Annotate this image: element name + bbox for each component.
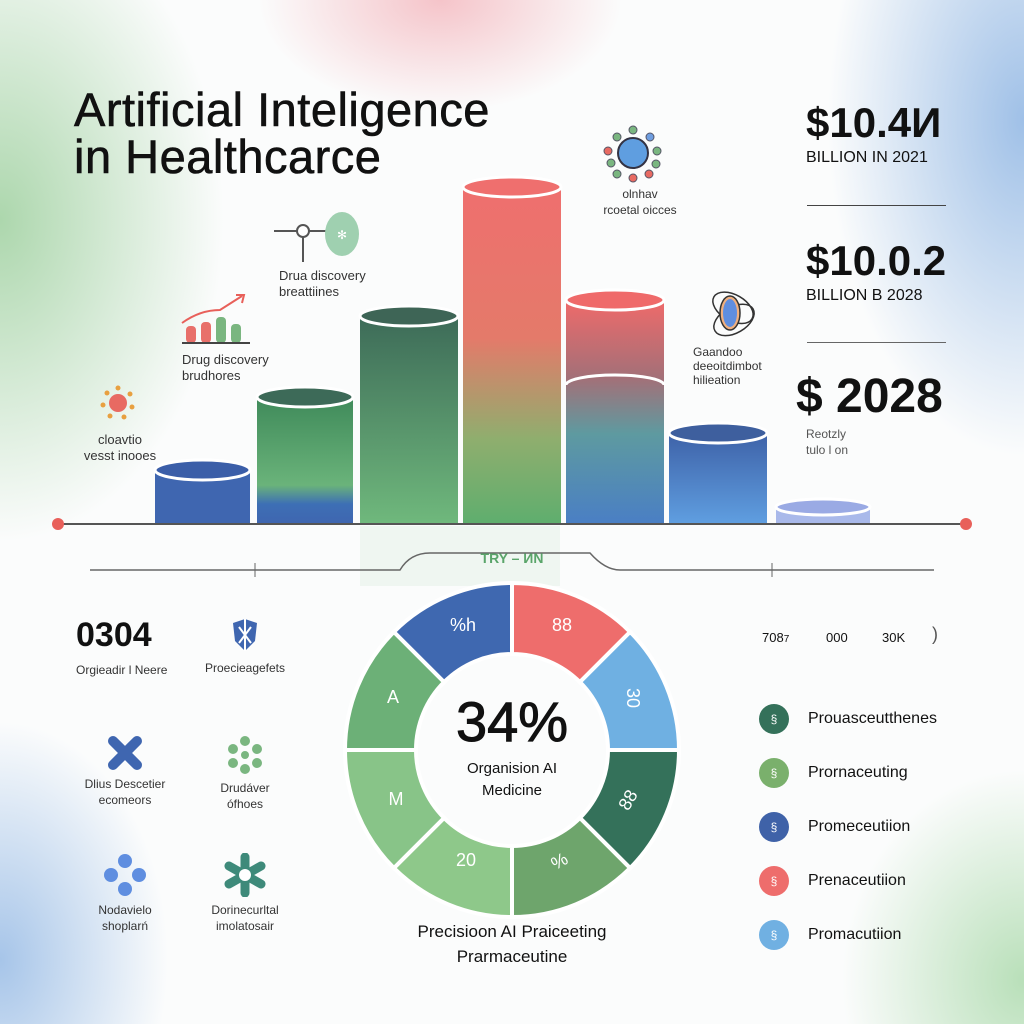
icon: green cluster: [228, 736, 262, 774]
segment light green 2: [345, 750, 444, 868]
text: imolatosair: [216, 919, 274, 933]
icon: atom: [707, 286, 760, 342]
icon: four dots: [104, 854, 146, 896]
stat: 2028: $10.0.2: [806, 237, 946, 284]
icons grid: Proecieagefets: [205, 661, 285, 675]
text: Nodavielo: [98, 903, 152, 917]
donut center text: Medicine: [482, 782, 542, 799]
segment light green 1: [394, 818, 512, 917]
text: shoplarń: [102, 919, 148, 933]
donut chart: A: [387, 687, 399, 707]
donut chart: 88: [552, 615, 572, 635]
text: Dlius Descetier: [85, 777, 165, 791]
icons grid: [205, 619, 285, 675]
donut chart: 30: [623, 688, 643, 708]
donut chart: %h: [450, 615, 476, 635]
donut chart: %: [548, 848, 571, 874]
icon: network node: [274, 212, 359, 262]
text: ófhoes: [227, 797, 263, 811]
text: rcoetal oicces: [603, 203, 677, 217]
legend: §: [771, 928, 777, 942]
stat: $2028: [796, 370, 943, 457]
donut caption: Precisioon AI Praiceeting: [418, 922, 606, 941]
bar labels: [84, 432, 156, 463]
segment red: [512, 583, 630, 682]
segment dark green: [580, 750, 679, 868]
legend: Prouasceutthenes: [808, 710, 937, 727]
legend: §: [771, 874, 777, 888]
bar 5: [566, 290, 664, 523]
legend: §: [771, 820, 777, 834]
title: Artificial Inteligence: [74, 83, 490, 136]
bar labels: cloavtio: [98, 432, 142, 447]
legend: Prornaceuting: [808, 764, 908, 781]
text: ): [932, 624, 938, 644]
title: [74, 83, 490, 183]
text: Gaandoo: [693, 345, 742, 359]
icon: blue x: [108, 736, 142, 770]
text: 000: [826, 630, 848, 645]
legend: §: [771, 766, 777, 780]
axis: [52, 518, 972, 530]
legend: Prenaceutiion: [808, 872, 906, 889]
icon: molecule ring: [604, 126, 661, 182]
stat: $2028: $ 2028: [796, 370, 943, 423]
bar chart: [52, 126, 972, 586]
bar 7: [776, 499, 870, 523]
donut chart: 88: [614, 786, 642, 814]
donut center text: [456, 690, 568, 799]
donut caption: Prarmaceutine: [457, 947, 567, 966]
text: hilieation: [693, 373, 740, 387]
donut center text: 34%: [456, 690, 568, 753]
donut caption: [418, 922, 606, 966]
text: breattiines: [279, 284, 339, 299]
segment light blue: [580, 632, 679, 750]
bar 1: [155, 460, 250, 523]
donut chart: M: [388, 789, 404, 809]
bar 4: [463, 177, 561, 523]
stat: $2028: tulo l on: [806, 443, 848, 457]
timeline line: TRY – ИN: [481, 550, 543, 566]
bar labels: vesst inooes: [84, 448, 156, 463]
segment blue: [394, 583, 512, 682]
left stat: 0304: [76, 616, 152, 654]
legend: [759, 704, 937, 950]
text: deeoitdimbot: [693, 359, 762, 373]
top right numbers: 7087: [762, 630, 789, 645]
text: Dorinecurltal: [211, 903, 279, 917]
icon: network node: ✻: [337, 228, 347, 242]
stat: 2021: BILLION IN 2021: [806, 149, 928, 166]
donut center text: Organision AI: [467, 760, 557, 777]
text: ecomeors: [99, 793, 151, 807]
icon: teal flower: [224, 853, 266, 897]
legend: Promeceutiion: [808, 818, 910, 835]
stat: 2021: $10.4И: [806, 99, 941, 146]
timeline line: [90, 550, 934, 577]
text: 30K: [882, 630, 905, 645]
text: brudhores: [182, 368, 241, 383]
legend: Promacutiion: [808, 926, 901, 943]
icon: virus: [100, 386, 134, 420]
icon: shield: [233, 619, 257, 650]
text: Orgieadir l Neere: [76, 663, 167, 677]
donut chart: 20: [456, 850, 476, 870]
segment green: [345, 632, 444, 750]
bar 2: [257, 387, 353, 523]
title: in Healthcarce: [74, 130, 381, 183]
text: Drudáver: [220, 781, 270, 795]
icon: mini bar chart: [182, 295, 250, 343]
stat: 2028: BILLION B 2028: [806, 287, 923, 304]
text: olnhav: [622, 187, 658, 201]
stat: $2028: Reotzly: [806, 427, 846, 441]
text: Drug discovery: [182, 352, 269, 367]
segment mid green: [512, 818, 630, 917]
legend: §: [771, 712, 777, 726]
bar 6: [669, 423, 767, 523]
bar 3: [360, 306, 458, 523]
text: Drua discovery: [279, 268, 366, 283]
